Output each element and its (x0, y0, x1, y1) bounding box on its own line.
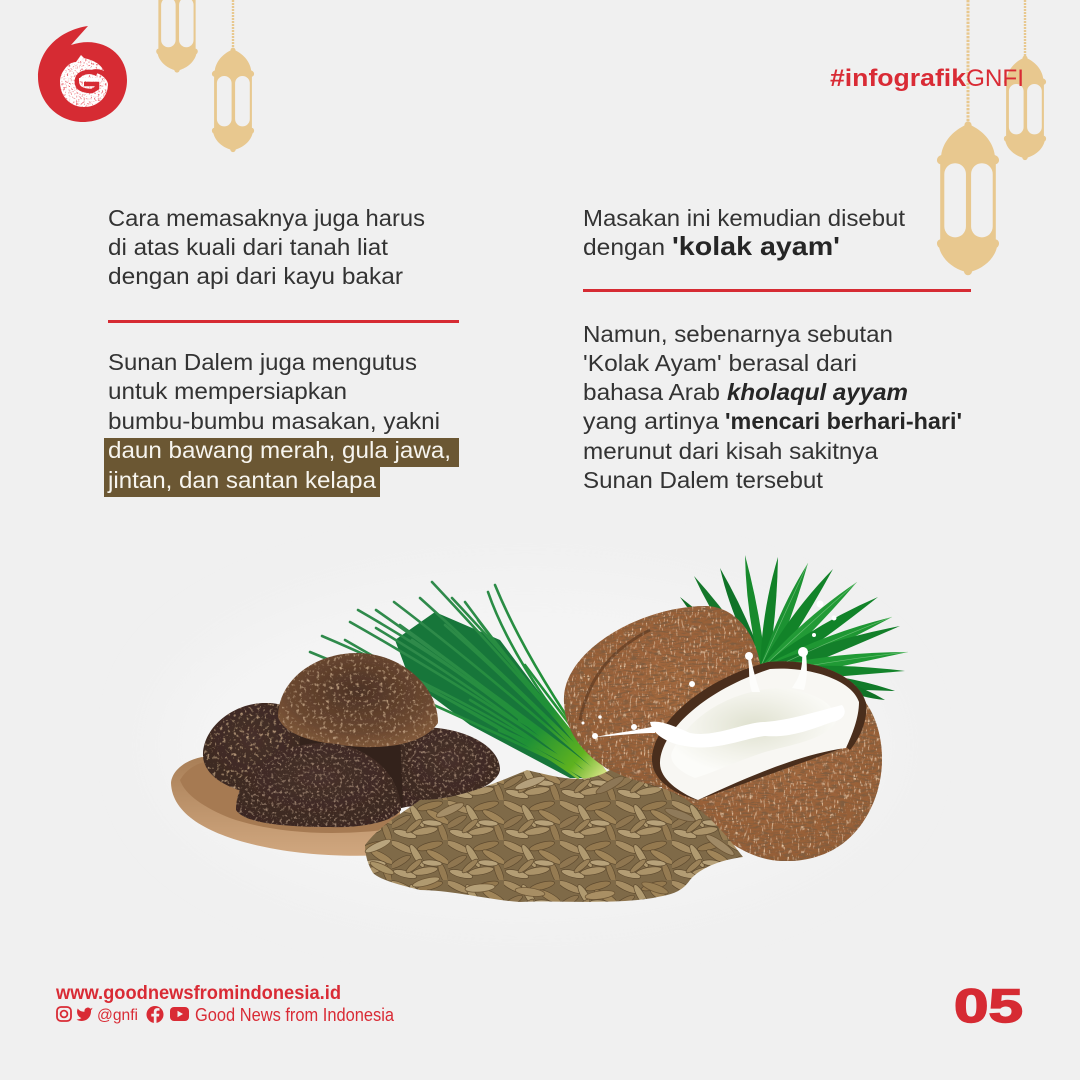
icon: instagram (57, 1007, 71, 1021)
text block: asal kata: yang artinya (583, 408, 719, 434)
highlighted ingredients: jintan, dan santan kelapa (107, 467, 376, 493)
hashtag: #infografikGNFI (830, 65, 1024, 92)
wooden plate (171, 757, 400, 856)
text block: bumbu masakan: bumbu-bumbu masakan, yakni (108, 408, 440, 434)
divider right (583, 289, 971, 292)
highlighted ingredients (104, 437, 459, 497)
text block: bumbu masakan: Sunan Dalem juga mengutus (108, 349, 417, 375)
handle: @gnfi (97, 1007, 138, 1024)
lantern: top left short (156, 0, 198, 73)
dark rim (652, 661, 866, 800)
divider left (108, 320, 459, 323)
text block: asal kata: Namun, sebenarnya sebutan (583, 321, 893, 347)
illustration: ingredients (171, 555, 908, 902)
text block: cara memasak (108, 205, 425, 289)
icon: youtube (170, 1007, 189, 1021)
social media row (57, 1005, 395, 1025)
lantern: right small with chain (1004, 0, 1046, 160)
text block: bumbu masakan (108, 349, 440, 434)
text block: cara memasak: Cara memasaknya juga harus (108, 205, 425, 231)
milk splash (650, 705, 845, 747)
page name: Good News from Indonesia (195, 1005, 395, 1025)
text block: kolak ayam: 'kolak ayam' (672, 231, 840, 261)
lantern: left with chain (212, 0, 254, 152)
text block: asal kata (583, 321, 962, 493)
soft halo behind food (165, 580, 885, 910)
text block: asal kata: bahasa Arab (583, 379, 720, 405)
text block: cara memasak: dengan api dari kayu bakar (108, 263, 403, 289)
text block: asal kata: 'mencari berhari-hari' (725, 408, 962, 434)
front coconut with milk (582, 600, 882, 861)
text block: kolak ayam: Masakan ini kemudian disebut (583, 205, 906, 231)
back coconut (564, 606, 762, 787)
logo: GNFI eagle (38, 26, 127, 122)
lantern: right large with chain (937, 0, 999, 275)
palm sugar domes (203, 653, 500, 827)
highlighted ingredients: daun bawang merah, gula jawa, (108, 437, 451, 463)
cumin seed pile (364, 770, 743, 902)
text block: asal kata: Sunan Dalem tersebut (583, 467, 824, 493)
text block: asal kata: kholaqul ayyam (727, 379, 908, 405)
milk pool (671, 688, 836, 778)
text block: bumbu masakan: untuk mempersiapkan (108, 378, 347, 404)
text block: kolak ayam: dengan (583, 234, 665, 260)
icon: facebook (146, 1006, 164, 1023)
website url: www.goodnewsfromindonesia.id (55, 983, 341, 1004)
icon: twitter (76, 1008, 93, 1021)
text block: cara memasak: di atas kuali dari tanah liat (108, 234, 389, 260)
coconut meat (660, 669, 859, 800)
text block: asal kata: merunut dari kisah sakitnya (583, 438, 878, 464)
palm leaf (680, 555, 908, 700)
text block: asal kata: 'Kolak Ayam' berasal dari (583, 350, 857, 376)
hashtag: #infografikGNFI: GNFI (966, 65, 1024, 92)
text block: kolak ayam (583, 205, 906, 261)
page number: 05 (954, 979, 1023, 1032)
chives (310, 582, 610, 778)
hashtag: #infografikGNFI: #infografik (830, 65, 967, 92)
